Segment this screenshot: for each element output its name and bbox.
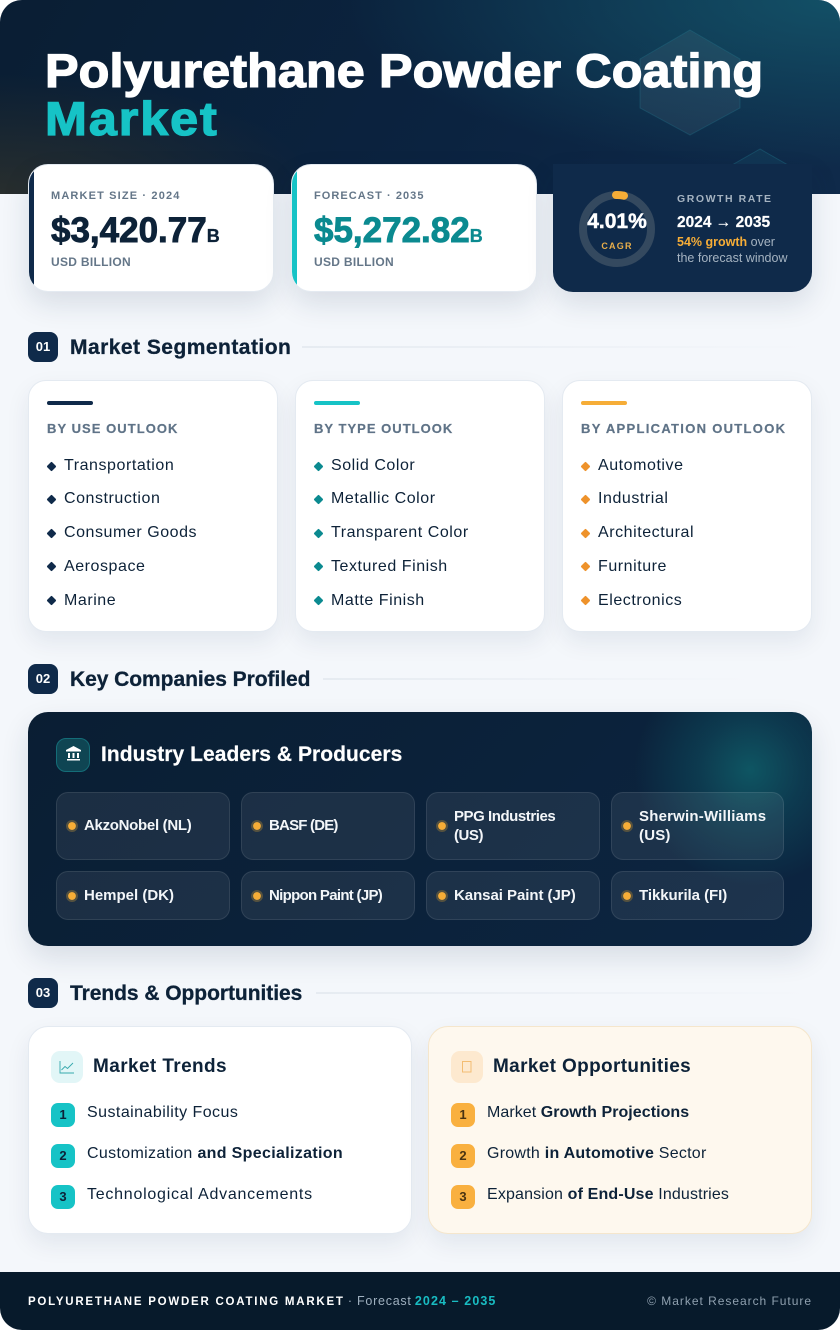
opportunity 1 <box>451 1103 689 1127</box>
company: Hempel <box>56 871 230 920</box>
growth label: GROWTH RATE <box>677 193 773 205</box>
CAGR label: CAGR <box>601 241 633 251</box>
badge: 03 <box>36 985 50 1000</box>
decorative hexagon <box>640 30 787 164</box>
trend 3: Technological Advancements <box>87 1186 313 1203</box>
items: Architectural <box>598 524 694 541</box>
trend 1: 1 <box>59 1107 67 1122</box>
company: AkzoNobel: AkzoNobel (NL) <box>84 817 191 834</box>
panel: by type outlook <box>295 380 545 632</box>
title: Market Trends <box>93 1056 227 1077</box>
items: Textured Finish <box>331 558 448 575</box>
company: AkzoNobel <box>56 792 230 860</box>
icon: placeholder glyph <box>451 1051 483 1083</box>
panel: market opportunities <box>428 1026 812 1234</box>
title: Market Opportunities <box>493 1056 691 1077</box>
opportunity 3: 3 <box>459 1189 467 1204</box>
company: BASF: BASF (DE) <box>269 817 338 834</box>
company: BASF <box>241 792 415 860</box>
company: Nippon Paint <box>241 871 415 920</box>
footer title: POLYURETHANE POWDER COATING MARKET · Forecast 2024 – 2035 <box>28 1294 496 1308</box>
trend 3: 3 <box>59 1189 67 1204</box>
section 02 heading <box>28 664 506 694</box>
panel: by application outlook <box>562 380 812 632</box>
CAGR value: 4.01% <box>587 210 647 233</box>
items: Transparent Color <box>331 524 469 541</box>
items <box>314 457 469 609</box>
opportunity 2: Growth in Automotive Sector <box>487 1145 707 1162</box>
footer <box>0 1272 840 1330</box>
trend 2 <box>51 1144 343 1168</box>
items: Consumer Goods <box>64 524 197 541</box>
section 03 heading <box>28 978 528 1008</box>
items: Automotive <box>598 457 684 474</box>
icon: bank <box>56 738 90 772</box>
opportunity 1: 1 <box>459 1107 467 1122</box>
company: Hempel: Hempel (DK) <box>84 887 174 904</box>
panel: companies <box>28 712 812 946</box>
company: PPG: (US) <box>454 827 483 844</box>
stat card: growth rate <box>553 164 812 292</box>
items <box>581 457 694 609</box>
panel: market trends <box>28 1026 412 1234</box>
trend 2: Customization and Specialization <box>87 1145 343 1162</box>
unit: USD BILLION <box>314 255 394 269</box>
trend 3 <box>51 1185 313 1209</box>
opportunity 3: Expansion of End-Use Industries <box>487 1186 729 1203</box>
items: Aerospace <box>64 558 145 575</box>
unit: USD BILLION <box>51 255 131 269</box>
growth note: the forecast window <box>677 251 787 265</box>
items: Transportation <box>64 457 174 474</box>
trend 1: Sustainability Focus <box>87 1104 238 1121</box>
growth years: 2024 → 2035 <box>677 214 770 231</box>
opportunity 2 <box>451 1144 707 1168</box>
items: Industrial <box>598 490 668 507</box>
company: Nippon Paint: Nippon Paint (JP) <box>269 887 382 904</box>
company: Kansai Paint: Kansai Paint (JP) <box>454 887 576 904</box>
items: Matte Finish <box>331 592 425 609</box>
opportunity 2: 2 <box>459 1148 467 1163</box>
heading: BY APPLICATION OUTLOOK <box>581 421 786 436</box>
badge <box>28 664 58 694</box>
heading text: Market Segmentation <box>70 336 291 358</box>
growth note: 54% growth over <box>677 235 775 249</box>
items: Solid Color <box>331 457 415 474</box>
company: Sherwin-Williams: (US) <box>639 827 671 844</box>
footer credit: © Market Research Future <box>647 1294 812 1308</box>
items <box>46 457 197 609</box>
items: Construction <box>64 490 160 507</box>
header banner <box>0 0 840 194</box>
accent bar <box>292 165 297 293</box>
trend 1 <box>51 1103 238 1127</box>
company: Tikkurila <box>611 871 784 920</box>
growth note <box>677 235 788 265</box>
badge: 02 <box>36 671 50 686</box>
items: Marine <box>64 592 116 609</box>
section 01 heading <box>28 332 520 362</box>
heading: BY TYPE OUTLOOK <box>314 421 453 436</box>
accent bar <box>29 165 34 293</box>
items: Furniture <box>598 558 667 575</box>
company: PPG <box>426 792 600 860</box>
label: MARKET SIZE · 2024 <box>51 190 181 202</box>
opportunity 1: Market Growth Projections <box>487 1104 689 1121</box>
panel title: Industry Leaders & Producers <box>101 743 402 766</box>
badge: 01 <box>36 339 50 354</box>
stat card: market size <box>28 164 274 292</box>
company: Kansai Paint <box>426 871 600 920</box>
value: $3,420.77B <box>51 211 220 250</box>
items: Electronics <box>598 592 682 609</box>
stat card: forecast <box>291 164 537 292</box>
heading text: Trends & Opportunities <box>70 982 302 1004</box>
title line 1: Polyurethane Powder Coating <box>45 44 763 97</box>
icon: chart <box>51 1051 83 1083</box>
panel: by use outlook <box>28 380 278 632</box>
label: FORECAST · 2035 <box>314 190 424 202</box>
CAGR ring <box>579 191 655 267</box>
title line 2: Market <box>45 92 219 145</box>
heading text: Key Companies Profiled <box>70 668 310 690</box>
value: $5,272.82B <box>314 211 483 250</box>
company: Tikkurila: Tikkurila (FI) <box>639 887 727 904</box>
company: PPG: PPG Industries <box>454 808 555 825</box>
company: Sherwin-Williams <box>611 792 784 860</box>
items: Metallic Color <box>331 490 436 507</box>
badge <box>28 978 58 1008</box>
company: Sherwin-Williams: Sherwin-Williams <box>639 808 766 825</box>
heading: BY USE OUTLOOK <box>47 421 178 436</box>
badge <box>28 332 58 362</box>
opportunity 3 <box>451 1185 729 1209</box>
trend 2: 2 <box>59 1148 67 1163</box>
